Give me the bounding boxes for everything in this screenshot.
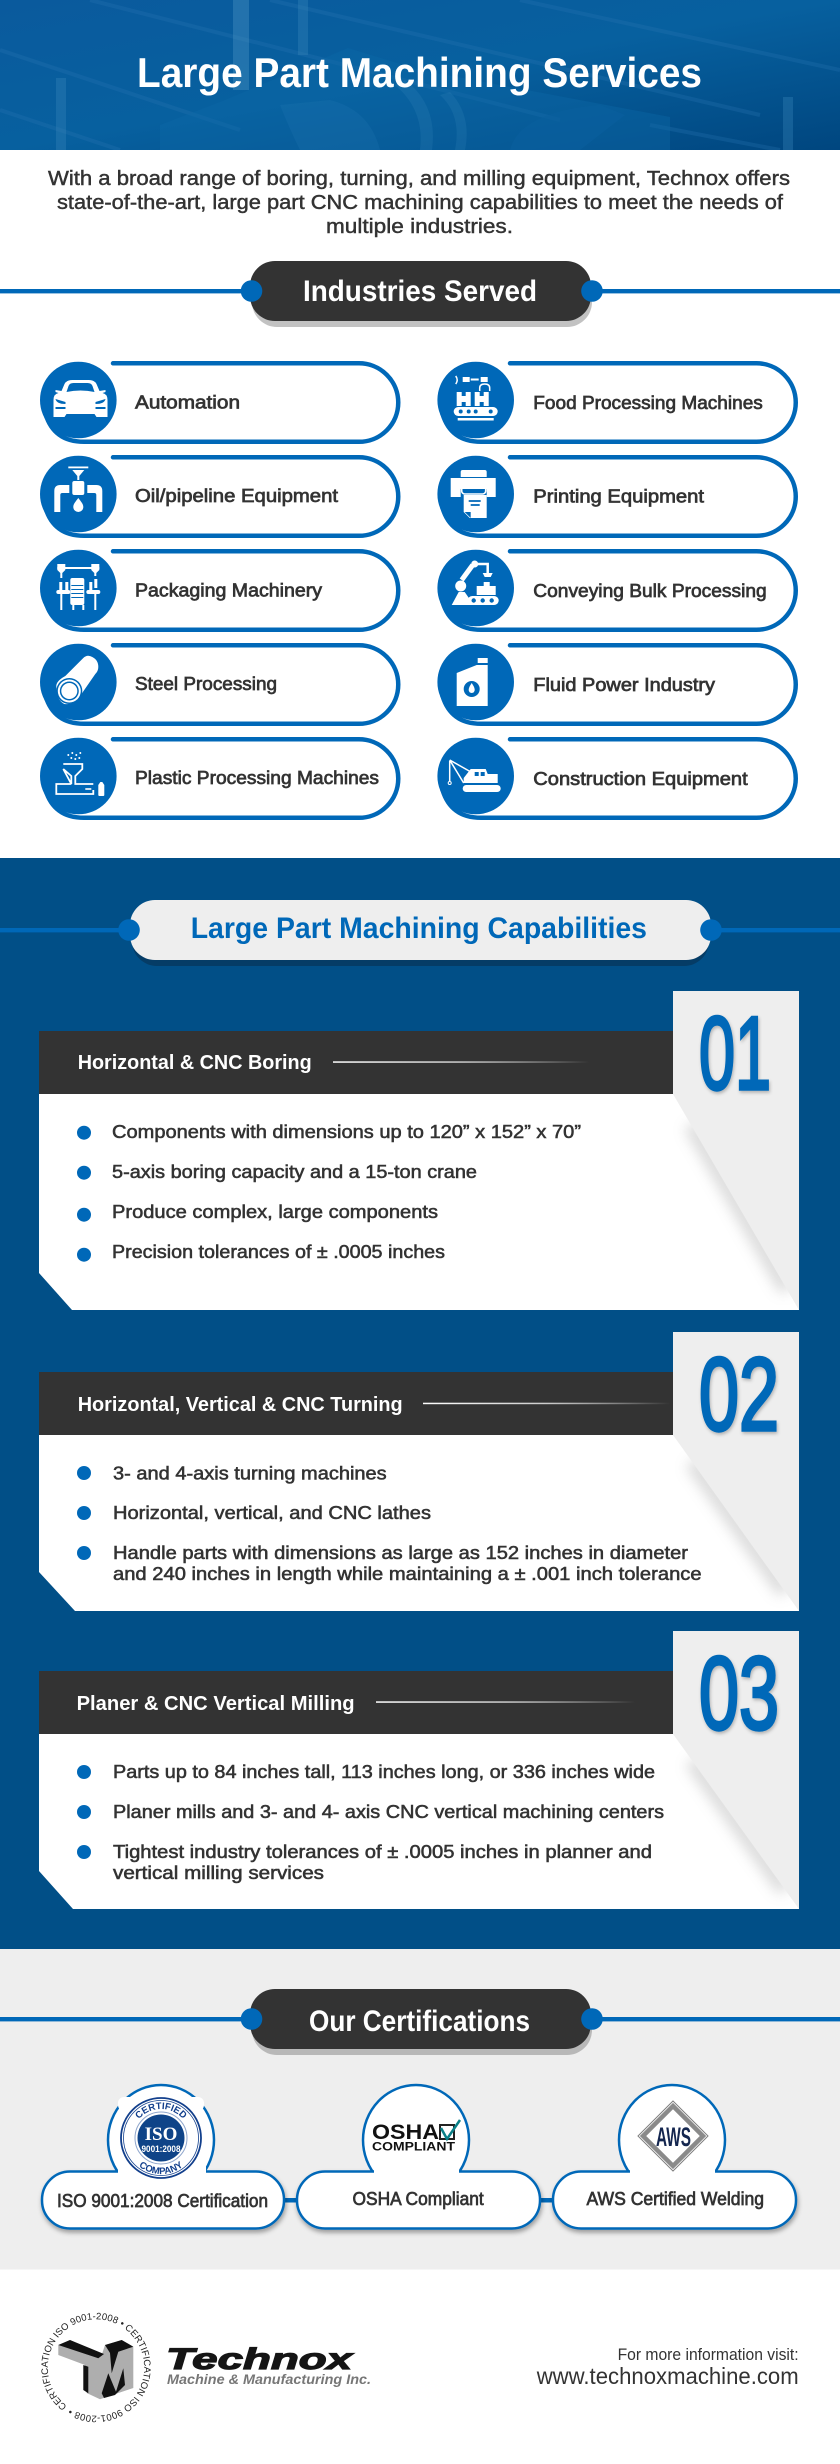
industry: printing: Printing Equipment <box>533 486 704 506</box>
intro text <box>48 168 790 238</box>
icon: pipeline valve <box>54 466 102 512</box>
industry: steel <box>40 644 398 724</box>
bullet list: 5-axis boring capacity and a 15-ton crane <box>112 1162 477 1182</box>
icon: ISO badge <box>120 2097 202 2179</box>
number 01: 01 <box>699 996 771 1112</box>
section heading: our certifications <box>0 1989 840 2055</box>
card: AWS: AWS Certified Welding <box>586 2189 764 2209</box>
icon: car <box>54 380 108 417</box>
card heading: Planer & CNC Vertical Milling <box>77 1693 355 1715</box>
industry: conveying: Conveying Bulk Processing <box>533 581 767 601</box>
industry: packaging: Packaging Machinery <box>135 581 322 601</box>
industry: oil pipeline: Oil/pipeline Equipment <box>135 486 338 506</box>
industry: automation: Automation <box>135 392 240 412</box>
icon: ISO badge: COMPANY <box>140 2161 182 2174</box>
card heading: Horizontal, Vertical & CNC Turning <box>78 1394 403 1416</box>
icon: oil can <box>457 658 488 706</box>
bullet list <box>77 1762 664 1883</box>
bullet list: 3- and 4-axis turning machines <box>113 1463 387 1483</box>
intro text: With a broad range of boring, turning, and milling equipment, Technox offers <box>48 168 790 190</box>
icon: AWS diamond <box>638 2101 708 2171</box>
icon: crawler crane <box>448 760 501 792</box>
industry: construction <box>437 738 796 818</box>
industry: plastic: Plastic Processing Machines <box>135 768 379 788</box>
logo seal ring text: CERTIFICATION ISO 9001-2008 • CERTIFICATION ISO 9001-2008 • <box>41 2312 151 2422</box>
card: OSHA: OSHA Compliant <box>352 2189 484 2209</box>
panel: certifications background <box>0 1949 840 2270</box>
bullet list: Parts up to 84 inches tall, 113 inches long, or 336 inches wide <box>113 1762 655 1782</box>
icon: OSHA compliant logo: OSHA <box>372 2121 439 2144</box>
bullet list: Produce complex, large components <box>112 1202 438 1222</box>
industry: steel: Steel Processing <box>135 674 277 694</box>
icon: plastic moulding <box>56 752 104 796</box>
number 03: 03 <box>699 1636 779 1752</box>
icon: ISO badge: ISO <box>145 2124 177 2145</box>
card: AWS <box>553 2085 796 2228</box>
industry: fluid power: Fluid Power Industry <box>533 675 715 695</box>
industry: automation <box>40 362 398 442</box>
panel: card 03 milling <box>39 1631 799 1909</box>
logo TM block <box>58 2340 133 2399</box>
section heading: industries served: Industries Served <box>303 275 537 308</box>
icon: OSHA compliant logo <box>372 2120 460 2154</box>
bullet list: Planer mills and 3- and 4- axis CNC vertical machining centers <box>113 1802 664 1822</box>
panel: card 01 boring <box>39 991 799 1310</box>
intro text: state-of-the-art, large part CNC machining capabilities to meet the needs of <box>57 192 783 214</box>
contact text <box>536 2346 799 2389</box>
title: Large Part Machining Services <box>137 49 702 96</box>
card: ISO 9001: ISO 9001:2008 Certification <box>57 2191 268 2211</box>
section heading: capabilities <box>0 900 840 966</box>
section heading: our certifications: Our Certifications <box>309 2005 530 2038</box>
card: OSHA <box>297 2085 540 2228</box>
logo: Technox <box>41 2312 371 2422</box>
icon: packaging line <box>56 564 100 610</box>
bullet list: Tightest industry tolerances of ± .0005 inches in planner and <box>113 1842 652 1862</box>
panel: certification cards <box>39 2084 801 2236</box>
bullet list: Precision tolerances of ± .0005 inches <box>112 1242 445 1262</box>
industry: construction: Construction Equipment <box>533 769 748 789</box>
industry: oil pipeline <box>40 456 398 536</box>
card heading: Horizontal & CNC Boring <box>78 1052 312 1074</box>
contact text: www.technoxmachine.com <box>536 2363 799 2389</box>
industry: food: Food Processing Machines <box>533 393 763 413</box>
icon: OSHA compliant logo: COMPLIANT <box>372 2142 455 2154</box>
bullet list: Horizontal, vertical, and CNC lathes <box>113 1503 431 1523</box>
industry: conveying <box>437 550 796 630</box>
industry: packaging <box>40 550 398 630</box>
intro text: multiple industries. <box>326 216 513 238</box>
icon: food machine <box>454 376 498 420</box>
bullet list: and 240 inches in length while maintaining a ± .001 inch tolerance <box>113 1564 702 1584</box>
icon: AWS diamond: AWS <box>656 2122 691 2152</box>
icon: ISO badge: 9001:2008 <box>142 2144 180 2155</box>
header banner <box>0 0 840 150</box>
bullet list <box>77 1463 702 1584</box>
panel: capabilities section background <box>0 858 840 1949</box>
bullet list: vertical milling services <box>113 1863 324 1883</box>
industry: plastic <box>40 738 398 818</box>
contact text: For more information visit: <box>618 2346 799 2364</box>
icon: robot arm conveyor <box>452 560 499 605</box>
section heading: capabilities: Large Part Machining Capabilities <box>191 912 647 945</box>
number 02: 02 <box>699 1337 779 1453</box>
logo wordmark: Technox <box>166 2343 354 2376</box>
logo tagline: Machine & Manufacturing Inc. <box>167 2371 371 2387</box>
bullet list: Components with dimensions up to 120” x 152” x 70” <box>112 1122 581 1142</box>
panel: industries right column <box>437 362 796 818</box>
section heading: industries served <box>0 261 840 327</box>
panel: industries left column <box>40 362 398 818</box>
panel: card 02 turning <box>39 1332 799 1611</box>
icon: ISO badge: CERTIFIED <box>136 2102 186 2118</box>
icon: steel roll <box>56 656 98 704</box>
industry: printing <box>437 456 796 536</box>
bullet list: Handle parts with dimensions as large as 152 inches in diameter <box>113 1543 688 1563</box>
card: ISO 9001 <box>39 2084 289 2236</box>
icon: printer <box>451 470 496 518</box>
bullet list <box>77 1122 581 1262</box>
industry: food <box>437 362 796 442</box>
industry: fluid power <box>437 644 796 724</box>
